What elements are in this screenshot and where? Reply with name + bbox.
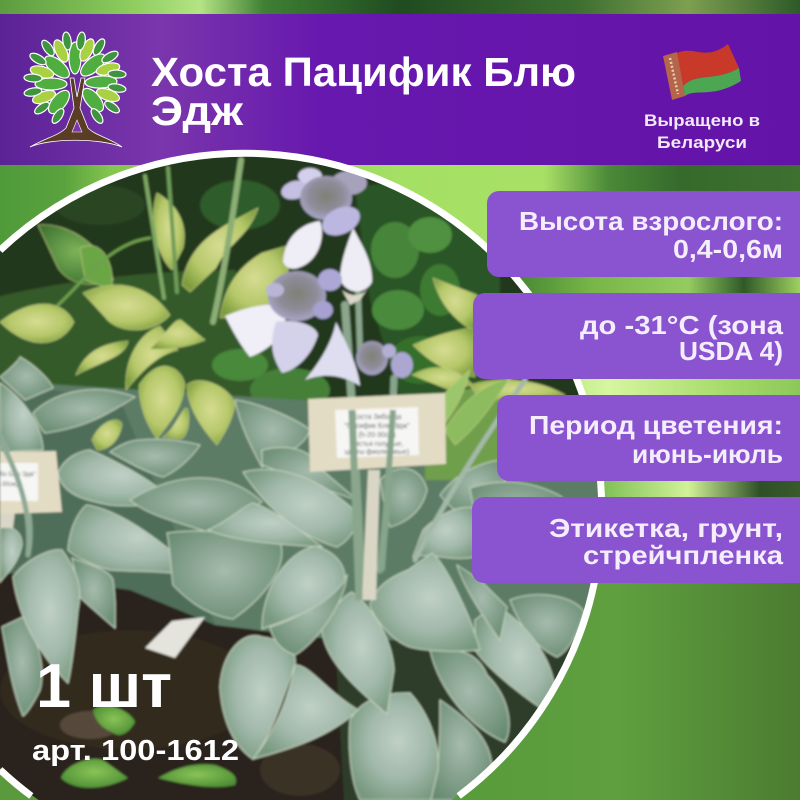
title [151,49,576,134]
garden label on the right: листья голубые, [351,440,403,448]
title: Эдж [151,88,244,134]
flower clusters [225,168,413,386]
middle bud cluster [266,269,342,321]
garden label on the right: Хоста Зиболда [353,413,402,421]
garden label on the right: (h-20-30см) [358,432,396,439]
panel: flowering period: июнь-июль [632,439,783,469]
panel: frost hardiness: до -31°С (зона [580,310,784,340]
icon: Belarus flag [663,44,741,100]
caption: grown in Belarus: Беларуси [657,133,747,152]
upper bud cluster [279,168,367,241]
panel: height [487,191,800,277]
header band [0,14,800,165]
garden label on the right [308,393,446,600]
bell flowers [225,221,372,386]
panel: flowering period: Период цветения: [529,410,783,440]
garden label on the left: -30см) [0,482,18,488]
lower bud cluster [356,341,413,378]
white ring around photo [0,153,602,796]
logo: tree [23,32,127,147]
paper tag on soil [145,617,205,658]
caption: grown in Belarus: Выращено в [644,111,760,130]
panel: frost hardiness: USDA 4) [679,336,783,366]
seedlings [61,706,236,788]
garden label on the right: цветы фиолетовые) [345,449,409,456]
quantity: 1 шт [36,652,172,721]
panel: height: 0,4-0,6м [673,234,783,264]
garden label on the left [0,440,62,555]
leaves [23,32,127,125]
panel: package contents [472,497,800,583]
panel: frost hardiness [473,293,800,379]
panel: flowering period [497,395,800,481]
garden label on the right: "Пасифик Блю Эдж" [344,423,410,430]
yellow-green hosta leaves [0,193,565,450]
round photo of hosta [0,140,625,800]
photo backdrop: dark foliage and soil [0,140,625,800]
garden label on the left: бо Блю Эдж" [0,472,36,478]
flower stems [0,160,525,595]
blue-grey hosta leaves [0,357,584,800]
panel: package contents: Этикетка, грунт, [549,513,783,543]
caption: grown in Belarus [644,111,760,152]
article number: арт. 100-1612 [32,735,239,767]
panel: package contents: стрейчпленка [583,540,784,570]
tree trunk and ground [30,78,122,147]
panel: height: Высота взрослого: [519,206,783,236]
title: Хоста Пацифик Блю [151,49,576,95]
